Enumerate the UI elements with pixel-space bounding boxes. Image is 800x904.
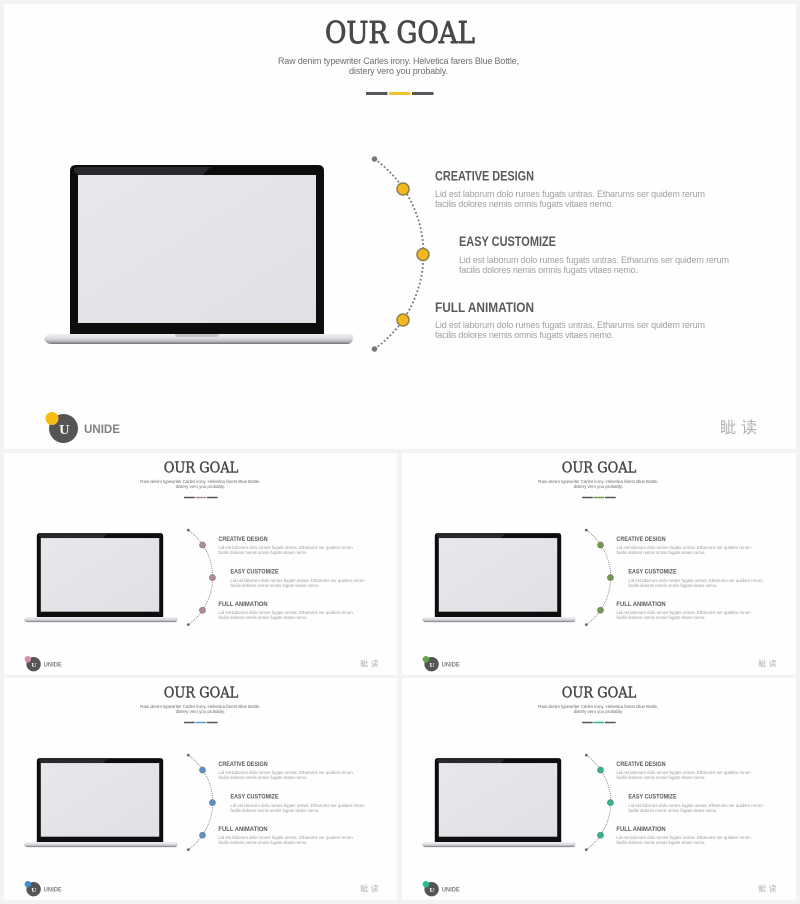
panel: green slide: facilis dolores nemis omnis fugats vitaes nemo. <box>616 615 705 620</box>
panel: blue slide: OUR GOAL <box>164 683 238 701</box>
panel: teal slide: Raw denim typewriter Carles irony. Helvetica farers Blue Bottle, <box>538 704 658 709</box>
panel: mauve slide: OUR GOAL <box>164 458 238 476</box>
panel: green slide: Lid est laborum dolo rumes fugats untras. Etharums ser quidem rerum <box>628 578 763 583</box>
panel: mauve slide: UNIDE <box>44 662 62 668</box>
feature: creative design: Lid est laborum dolo rumes fugats untras. Etharums ser quidem rerum <box>435 189 705 199</box>
panel: blue slide: facilis dolores nemis omnis fugats vitaes nemo. <box>218 840 307 845</box>
feature: full animation: facilis dolores nemis omnis fugats vitaes nemo. <box>435 330 614 340</box>
feature: easy customize: EASY CUSTOMIZE <box>459 234 556 249</box>
panel: mauve slide: CREATIVE DESIGN <box>218 536 268 543</box>
panel: mauve slide: Lid est laborum dolo rumes fugats untras. Etharums ser quidem rerum <box>230 578 365 583</box>
panel: teal slide: Lid est laborum dolo rumes fugats untras. Etharums ser quidem rerum <box>616 835 751 840</box>
logo <box>46 412 120 443</box>
panel: teal slide: OUR GOAL <box>562 683 636 701</box>
feature: easy customize: facilis dolores nemis omnis fugats vitaes nemo. <box>459 265 638 275</box>
panel: blue slide: facilis dolores nemis omnis fugats vitaes nemo. <box>230 808 319 813</box>
panel: mauve slide: 眦 读 <box>360 658 379 668</box>
feature: full animation: Lid est laborum dolo rumes fugats untras. Etharums ser quidem rerum <box>435 320 705 330</box>
panel: mauve slide: Lid est laborum dolo rumes fugats untras. Etharums ser quidem rerum <box>218 545 353 550</box>
feature: creative design: CREATIVE DESIGN <box>435 168 534 184</box>
feature: full animation <box>435 300 705 340</box>
watermark text: 眦 读 <box>720 419 757 437</box>
panel: teal slide <box>402 678 796 900</box>
panel: mauve slide: Lid est laborum dolo rumes fugats untras. Etharums ser quidem rerum <box>218 610 353 615</box>
laptop <box>44 165 353 344</box>
panel: blue slide: distery vero you probably. <box>176 709 225 714</box>
panel: teal slide: CREATIVE DESIGN <box>616 761 666 768</box>
subtitle: Raw denim typewriter Carles irony. Helvetica farers Blue Bottle, <box>278 56 519 66</box>
panel: mauve slide: Raw denim typewriter Carles irony. Helvetica farers Blue Bottle, <box>140 479 260 484</box>
panel: green slide: distery vero you probably. <box>574 484 623 489</box>
panel: teal slide: FULL ANIMATION <box>616 826 666 833</box>
logo: UNIDE <box>84 422 120 436</box>
panel: blue slide: FULL ANIMATION <box>218 826 268 833</box>
panel: mauve slide: facilis dolores nemis omnis fugats vitaes nemo. <box>230 583 319 588</box>
feature: easy customize: Lid est laborum dolo rumes fugats untras. Etharums ser quidem rerum <box>459 255 729 265</box>
subtitle: distery vero you probably. <box>349 66 448 76</box>
panel: green slide <box>402 453 796 675</box>
panel: green slide: facilis dolores nemis omnis fugats vitaes nemo. <box>616 550 705 555</box>
feature: creative design: facilis dolores nemis omnis fugats vitaes nemo. <box>435 199 614 209</box>
panel: mauve slide: distery vero you probably. <box>176 484 225 489</box>
panel: green slide: 眦 读 <box>758 658 777 668</box>
panel: mauve slide <box>4 453 397 675</box>
panel: mauve slide: U <box>31 662 37 669</box>
panel: teal slide: U <box>429 887 435 894</box>
panel: blue slide: Raw denim typewriter Carles irony. Helvetica farers Blue Bottle, <box>140 704 260 709</box>
panel: blue slide <box>4 678 397 900</box>
panel: green slide: FULL ANIMATION <box>616 601 666 608</box>
panel: green slide: EASY CUSTOMIZE <box>628 568 677 575</box>
panel: blue slide: UNIDE <box>44 887 62 893</box>
panel: teal slide: facilis dolores nemis omnis fugats vitaes nemo. <box>616 840 705 845</box>
panel: teal slide: facilis dolores nemis omnis fugats vitaes nemo. <box>628 808 717 813</box>
panel: teal slide: EASY CUSTOMIZE <box>628 793 677 800</box>
panel: green slide: OUR GOAL <box>562 458 636 476</box>
panel: blue slide: 眦 读 <box>360 883 379 893</box>
feature: creative design <box>435 168 705 209</box>
panel: green slide: UNIDE <box>442 662 460 668</box>
panel: teal slide: distery vero you probably. <box>574 709 623 714</box>
panel: blue slide: Lid est laborum dolo rumes fugats untras. Etharums ser quidem rerum <box>218 835 353 840</box>
title: OUR GOAL <box>325 16 475 51</box>
divider: tri-colour bar <box>366 92 434 95</box>
panel: blue slide: U <box>31 887 37 894</box>
panel: blue slide: EASY CUSTOMIZE <box>230 793 279 800</box>
panel: green slide: Lid est laborum dolo rumes fugats untras. Etharums ser quidem rerum <box>616 545 751 550</box>
panel: blue slide: CREATIVE DESIGN <box>218 761 268 768</box>
panel: green slide: Lid est laborum dolo rumes fugats untras. Etharums ser quidem rerum <box>616 610 751 615</box>
panel: mauve slide: FULL ANIMATION <box>218 601 268 608</box>
panel: teal slide: UNIDE <box>442 887 460 893</box>
subtitle <box>278 56 519 76</box>
panel: green slide: U <box>429 662 435 669</box>
panel: teal slide: 眦 读 <box>758 883 777 893</box>
feature: easy customize <box>459 234 729 275</box>
panel: green slide: facilis dolores nemis omnis fugats vitaes nemo. <box>628 583 717 588</box>
panel: mauve slide: EASY CUSTOMIZE <box>230 568 279 575</box>
panel: mauve slide: facilis dolores nemis omnis fugats vitaes nemo. <box>218 615 307 620</box>
panel: blue slide: facilis dolores nemis omnis fugats vitaes nemo. <box>218 775 307 780</box>
panel: teal slide: Lid est laborum dolo rumes fugats untras. Etharums ser quidem rerum <box>616 770 751 775</box>
panel: main yellow slide <box>4 4 796 449</box>
panel: blue slide: Lid est laborum dolo rumes fugats untras. Etharums ser quidem rerum <box>218 770 353 775</box>
logo: U <box>59 423 70 437</box>
panel: mauve slide: facilis dolores nemis omnis fugats vitaes nemo. <box>218 550 307 555</box>
feature: full animation: FULL ANIMATION <box>435 300 534 315</box>
panel: blue slide: Lid est laborum dolo rumes fugats untras. Etharums ser quidem rerum <box>230 803 365 808</box>
panel: teal slide: facilis dolores nemis omnis fugats vitaes nemo. <box>616 775 705 780</box>
panel: green slide: Raw denim typewriter Carles irony. Helvetica farers Blue Bottle, <box>538 479 658 484</box>
panel: teal slide: Lid est laborum dolo rumes fugats untras. Etharums ser quidem rerum <box>628 803 763 808</box>
panel: green slide: CREATIVE DESIGN <box>616 536 666 543</box>
timeline arc <box>372 156 429 352</box>
